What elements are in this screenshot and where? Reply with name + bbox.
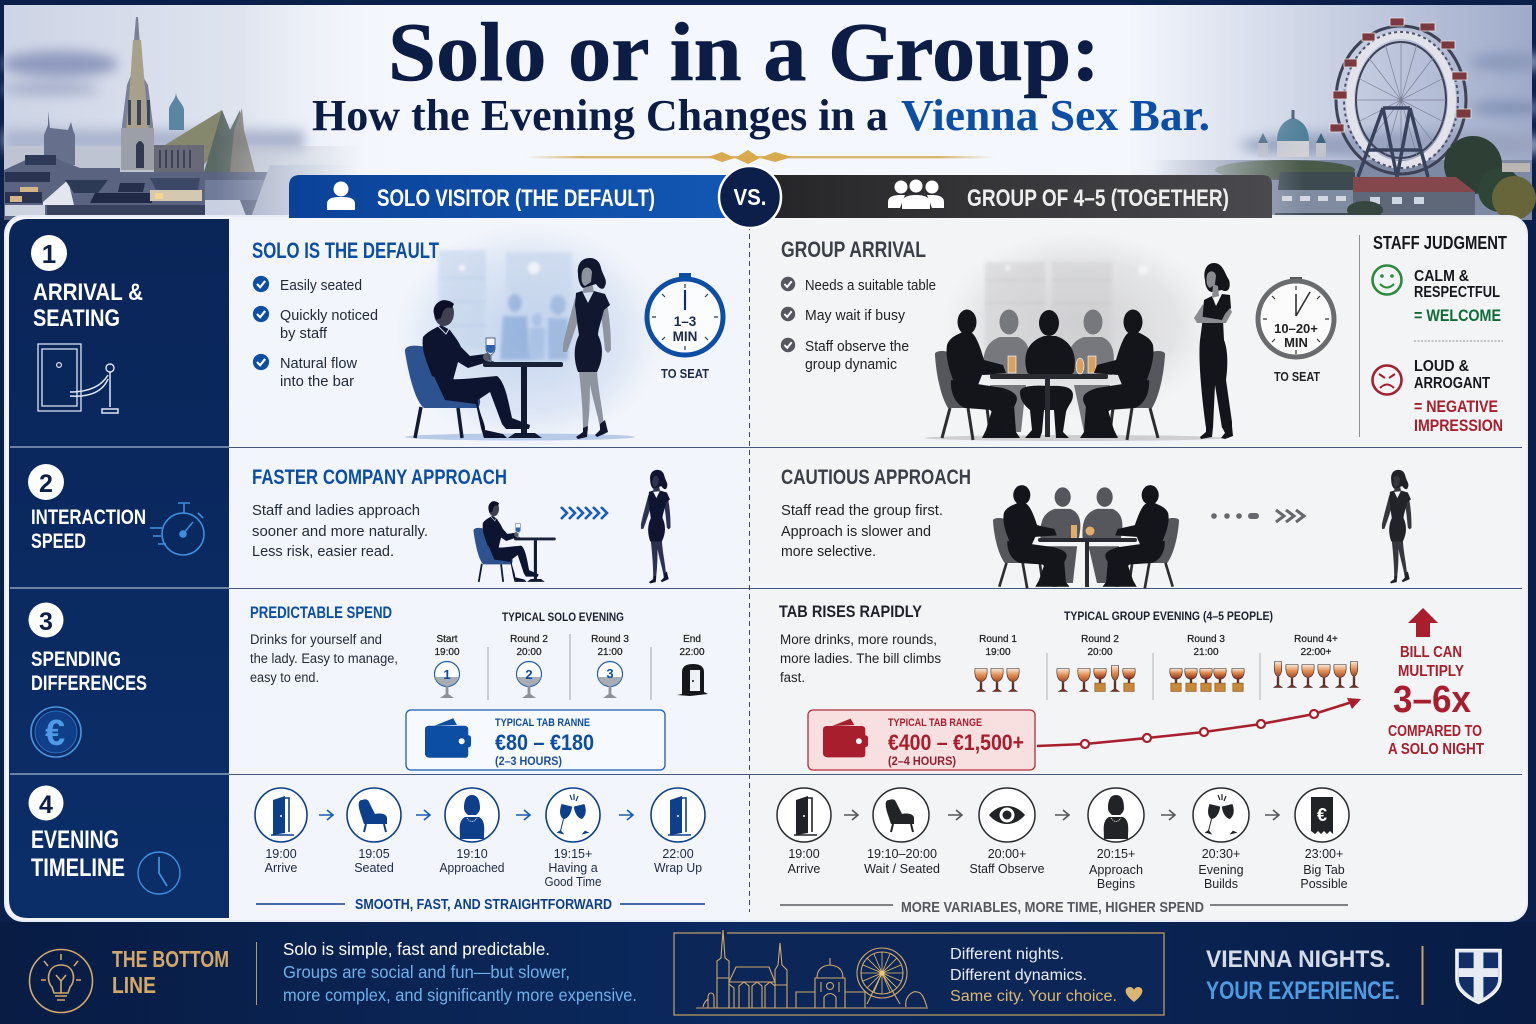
group timeline: labels: Approach [1089,863,1143,877]
stopwatch: 10-20+ min to seat: TO SEAT [1274,369,1320,384]
group interaction: heading and text: Approach is slower and [781,523,931,540]
chart: typical group evening [975,611,1358,700]
sidebar row 2: interaction speed: INTERACTION [31,506,146,529]
skyline: Riesenrad ferris wheel [1150,18,1536,220]
panel: staff judgment: LOUD & [1414,358,1469,375]
solo timeline: labels [265,847,702,889]
sidebar row 3: spending differences: SPENDING [31,648,121,671]
group timeline: labels: Staff Observe [970,862,1045,876]
group timeline: labels: 19:10–20:00 [867,847,937,861]
banner: group of 4-5 [770,175,1272,218]
icon: vienna shield [1456,950,1501,1003]
solo arrival: check list: Easily seated [280,277,362,294]
chart: typical group evening: 21:00 [1193,647,1219,658]
stopwatch: 1-3 min to seat: 1–3 [674,314,697,329]
solo timeline: labels: 19:15+ [554,847,592,861]
group interaction: men at table, dots and chevrons, woman [993,470,1412,588]
panel: staff judgment: CALM & [1414,268,1469,285]
footer: the bottom line [30,942,256,1012]
callout: typical tab range group: TYPICAL TAB RANGE [888,717,982,729]
solo timeline: labels: Good Time [544,875,602,889]
footer: gold skyline box: Different dynamics. [950,967,1087,984]
chart: typical group evening: Round 2 [1081,634,1119,645]
group arrival: check list: Staff observe the [805,338,909,355]
solo arrival: heading: SOLO IS THE DEFAULT [252,238,439,263]
group spending: heading and text [779,603,941,685]
banner: group of 4-5: GROUP OF 4–5 (TOGETHER) [967,185,1229,212]
panel: staff judgment: IMPRESSION [1414,416,1503,435]
panel: staff judgment: STAFF JUDGMENT [1373,233,1507,253]
sidebar row 4: evening timeline: 4 [39,791,53,819]
sidebar row 4: evening timeline: EVENING [31,826,119,854]
group interaction: heading and text: CAUTIOUS APPROACH [781,466,971,489]
group timeline: labels: 20:30+ [1202,847,1240,861]
group timeline: labels: Begins [1097,877,1135,891]
sidebar row 2: interaction speed [28,464,204,555]
group timeline: labels: Builds [1204,877,1238,891]
solo timeline: labels: 19:00 [265,847,297,861]
chart: typical group evening: Round 1 [979,634,1017,645]
banner: solo visitor [289,175,730,218]
skyline: St. Stephen's Cathedral [4,17,360,220]
group timeline: labels: 19:00 [788,847,820,861]
footer: vienna nights slogan: YOUR EXPERIENCE. [1206,977,1400,1005]
group timeline: labels: Wait / Seated [864,862,940,876]
group timeline: icons and arrows: € [1317,805,1327,825]
solo spending: heading and text: PREDICTABLE SPEND [250,604,392,622]
solo timeline: labels: Approached [440,861,505,875]
group interaction: heading and text: Staff read the group first. [781,502,943,519]
footer: gold skyline box: Same city. Your choice. [950,988,1117,1005]
sidebar row 3: spending differences: DIFFERENCES [31,672,147,695]
footer: summary text [283,939,637,1005]
sidebar row 2: interaction speed: SPEED [31,530,86,553]
gold ornament divider [525,150,995,164]
group arrival: illustration of five men at table and woman [925,230,1233,441]
group spending: heading and text: more ladies. The bill climbs [780,651,941,666]
footer: summary text: Solo is simple, fast and predictable. [283,939,550,959]
chart: typical group evening: 22:00+ [1301,647,1332,658]
group arrival: check list: May wait if busy [805,307,905,324]
solo timeline: summary line: SMOOTH, FAST, AND STRAIGHTFORWARD [355,897,612,913]
callout: typical tab range group: €400 – €1,500+ [888,730,1024,755]
group timeline: labels: 20:00+ [988,847,1026,861]
subtitle [312,91,1210,140]
chart: typical solo evening: 21:00 [597,647,623,658]
sidebar row 3: spending differences: € [45,712,65,753]
vs badge [719,166,781,228]
group spending: heading and text: More drinks, more rounds, [780,632,937,647]
solo interaction: heading and text: Less risk, easier read. [252,543,394,560]
sidebar row 1: arrival and seating: ARRIVAL & [33,279,143,306]
group interaction: heading and text [781,466,971,560]
chart: typical group evening: 19:00 [985,647,1011,658]
callout: typical tab range solo: (2–3 HOURS) [495,756,562,768]
solo timeline: labels: 19:10 [456,847,488,861]
group timeline: labels [788,847,1348,891]
row dividers and centre dashed line [229,225,1522,912]
group timeline: labels: Possible [1300,877,1348,891]
subtitle: Vienna Sex Bar. [901,91,1210,140]
stopwatch: 1-3 min to seat: TO SEAT [661,366,709,381]
group timeline: labels: 23:00+ [1305,847,1343,861]
solo interaction: heading and text: Staff and ladies approach [252,502,420,519]
chart: typical solo evening: 1 [443,667,451,682]
group timeline: icons and arrows [777,788,1349,842]
solo arrival: check list: Natural flow [280,355,357,372]
callout: typical tab range solo: TYPICAL TAB RANNE [495,717,590,729]
footer: vienna nights slogan [1206,946,1422,1005]
solo interaction: heading and text [252,466,507,560]
solo spending: heading and text: the lady. Easy to manage, [250,651,398,666]
group arrival: check list: Needs a suitable table [805,277,936,294]
chart: typical solo evening: 19:00 [434,647,460,658]
solo arrival: check list: by staff [280,325,328,342]
footer: gold skyline box [674,930,1164,1015]
title: Solo or in a Group: [388,6,1100,99]
panel: staff judgment: = WELCOME [1414,306,1501,325]
chart: typical group evening: 20:00 [1087,647,1113,658]
sidebar row 3: spending differences: 3 [39,608,53,636]
group timeline: summary line: MORE VARIABLES, MORE TIME, HIGHER SPEND [901,900,1204,916]
sidebar row 1: arrival and seating: SEATING [33,305,120,332]
callout: typical tab range solo [406,710,665,770]
callout: bill can multiply 3-6x: COMPARED TO [1388,723,1482,740]
group timeline: labels: Evening [1198,863,1244,877]
callout: bill can multiply 3-6x: MULTIPLY [1398,663,1464,680]
chart: typical group evening: Round 4+ [1294,634,1338,645]
solo arrival: check list: Quickly noticed [280,307,378,324]
callout: typical tab range group [808,710,1035,770]
sidebar row 4: evening timeline [28,786,180,894]
group timeline: labels: 20:15+ [1097,847,1135,861]
solo spending: heading and text: Drinks for yourself and [250,632,382,647]
stopwatch: 10-20+ min to seat: MIN [1284,335,1308,350]
stopwatch: 1-3 min to seat [647,273,723,381]
panel: staff judgment: RESPECTFUL [1414,284,1500,301]
footer: gold skyline box: Different nights. [950,946,1064,963]
sidebar row 4: evening timeline: TIMELINE [31,854,125,882]
sidebar row 1: arrival and seating [31,235,143,413]
solo arrival: check list: into the bar [280,373,354,390]
vs badge: VS. [734,184,766,210]
footer: summary text: more complex, and significantly more expensive. [283,985,637,1005]
stopwatch: 10-20+ min to seat [1258,277,1334,384]
solo timeline: labels: Wrap Up [654,861,702,875]
header sky panel [0,5,1536,219]
group spending: heading and text: TAB RISES RAPIDLY [779,603,922,621]
solo interaction: man seated, chevrons, woman [473,470,671,583]
stopwatch: 1-3 min to seat: MIN [673,329,697,344]
callout: bill can multiply 3-6x [1388,608,1484,758]
sidebar: row labels column [9,219,229,918]
solo arrival: check list [253,276,378,390]
panel: main card [5,216,1527,921]
sidebar row 1: arrival and seating: 1 [42,239,56,269]
footer: vienna nights slogan: VIENNA NIGHTS. [1206,946,1391,973]
group arrival: heading: GROUP ARRIVAL [781,237,926,262]
chart: rising bill line [1037,698,1361,748]
chart: typical solo evening: 3 [606,666,614,681]
chart: typical group evening: TYPICAL GROUP EVENING (4–5 PEOPLE) [1064,611,1273,623]
group arrival: check list: group dynamic [805,356,897,373]
chart: typical solo evening: Round 3 [591,634,629,645]
footer band [0,922,1536,1024]
solo timeline: labels: 22:00 [662,847,694,861]
callout: typical tab range solo: €80 – €180 [495,730,594,755]
group arrival: check list [781,277,936,373]
solo arrival: illustration of man seated and woman approaching [395,223,665,447]
group timeline: labels: Big Tab [1303,863,1345,877]
solo timeline: labels: Seated [354,861,394,875]
callout: typical tab range group: (2–4 HOURS) [888,756,956,768]
solo timeline: icons and arrows [255,788,705,842]
solo interaction: heading and text: FASTER COMPANY APPROACH [252,466,507,489]
footer: summary text: Groups are social and fun—but slower, [283,962,570,982]
banner: solo visitor: SOLO VISITOR (THE DEFAULT) [377,185,655,212]
callout: bill can multiply 3-6x: BILL CAN [1400,644,1462,661]
sidebar row 3: spending differences [28,602,147,757]
chart: typical solo evening: 22:00 [679,647,705,658]
callout: bill can multiply 3-6x: A SOLO NIGHT [1388,741,1484,758]
solo timeline: labels: Having a [548,861,598,875]
chart: typical solo evening: End [683,634,701,645]
group timeline: labels: Arrive [788,862,820,876]
solo timeline: labels: Arrive [265,861,297,875]
footer: the bottom line: THE BOTTOM [112,946,229,972]
panel: staff judgment [1360,233,1507,437]
chart: typical solo evening [434,612,708,700]
stopwatch: 10-20+ min to seat: 10–20+ [1274,321,1318,336]
solo timeline: labels: 19:05 [358,847,390,861]
chart: typical solo evening: 20:00 [516,647,542,658]
chart: typical solo evening: Round 2 [510,634,548,645]
chart: typical solo evening: 2 [525,667,533,682]
group spending: heading and text: fast. [780,670,805,685]
solo spending: heading and text: easy to end. [250,670,319,685]
solo spending: heading and text [250,604,398,685]
panel: staff judgment: = NEGATIVE [1414,397,1498,416]
panel: staff judgment: ARROGANT [1414,375,1490,392]
chart: typical solo evening: TYPICAL SOLO EVENING [502,612,624,624]
chart: typical solo evening: Start [436,634,458,645]
callout: bill can multiply 3-6x: 3–6x [1393,679,1471,721]
sidebar row 2: interaction speed: 2 [39,470,53,498]
footer: the bottom line: LINE [112,972,156,998]
group interaction: heading and text: more selective. [781,543,876,560]
chart: typical group evening: Round 3 [1187,634,1225,645]
solo interaction: heading and text: sooner and more naturally. [252,523,428,540]
subtitle: How the Evening Changes in a [312,91,888,140]
